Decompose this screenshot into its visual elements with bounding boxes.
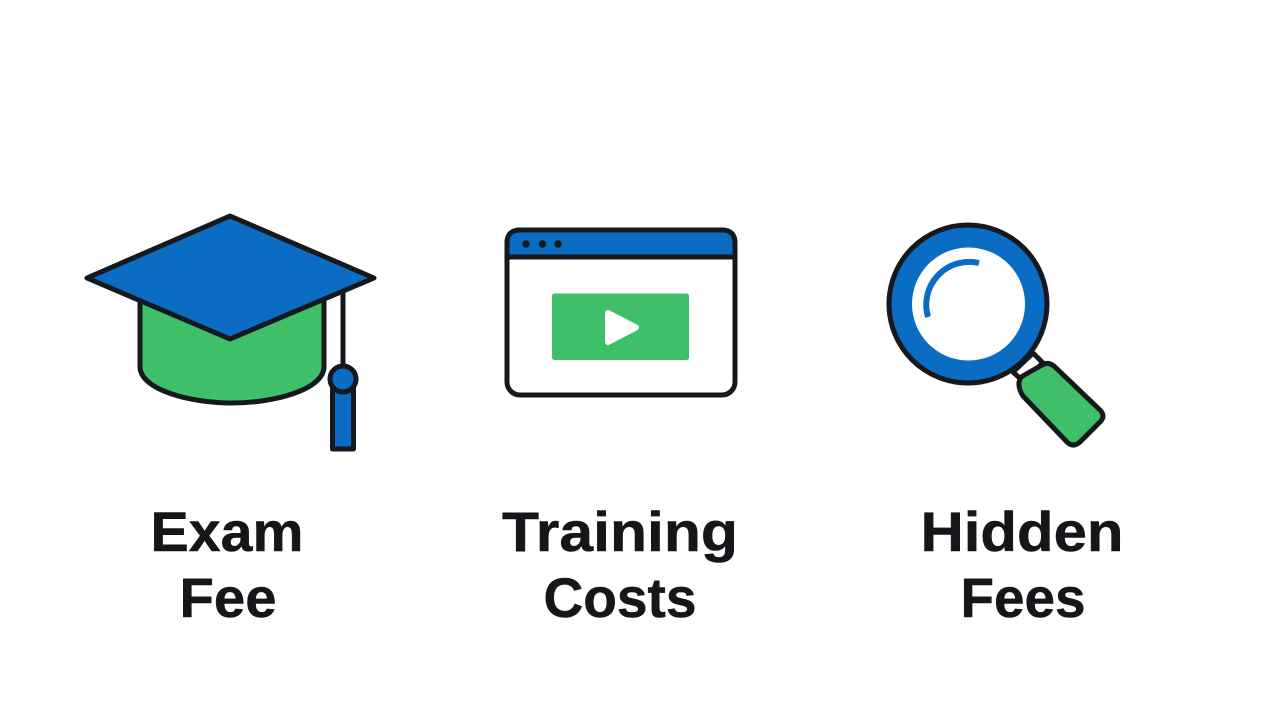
icon: video player window (507, 230, 735, 395)
label: Training Costs: Training (502, 500, 738, 563)
label: Hidden Fees: Hidden (920, 500, 1124, 563)
label: Hidden Fees: Fees (960, 566, 1086, 629)
label: Training Costs (502, 500, 738, 629)
label: Hidden Fees (920, 500, 1124, 629)
icon: magnifying glass (889, 225, 1103, 445)
label: Exam Fee (150, 500, 304, 629)
label: Exam Fee: Fee (180, 566, 276, 629)
label: Training Costs: Costs (544, 566, 696, 629)
icon: graduation cap (87, 216, 374, 449)
label: Exam Fee: Exam (150, 500, 304, 563)
